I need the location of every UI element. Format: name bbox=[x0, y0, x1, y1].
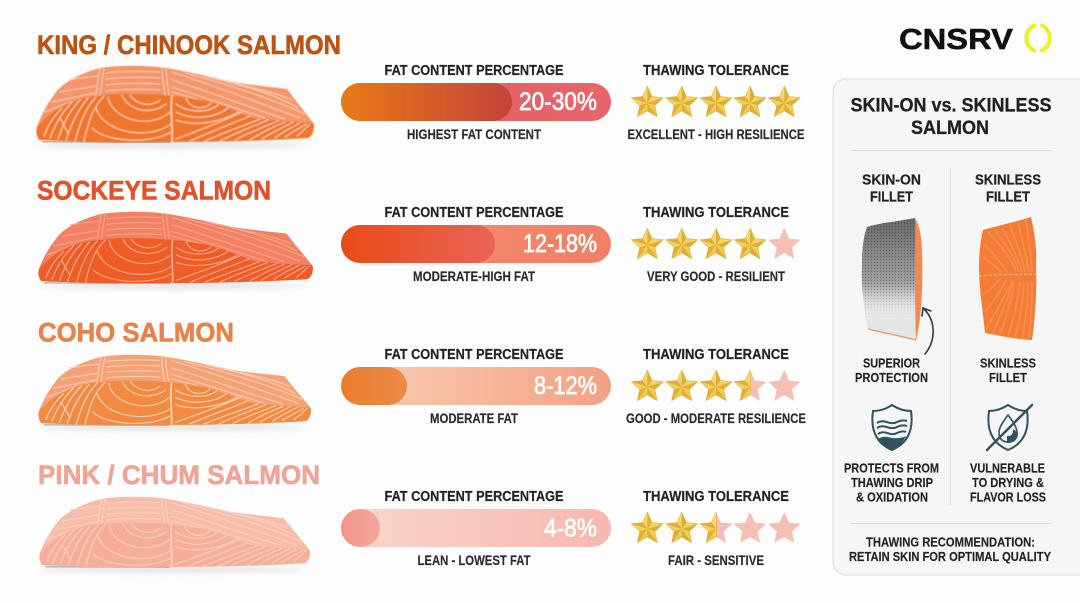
image: coho salmon fillet bbox=[38, 355, 311, 431]
heading: King / Chinook salmon: KING / CHINOOK SALMON bbox=[37, 30, 341, 60]
image: skinless fillet bbox=[979, 217, 1036, 340]
caption: superior protection: SUPERIOR bbox=[863, 356, 921, 370]
label: fat content percentage: FAT CONTENT PERCENTAGE bbox=[384, 489, 564, 505]
caption: skinless fillet: FILLET bbox=[989, 370, 1027, 385]
bar: fat 8-12%: 8-12% bbox=[534, 372, 597, 400]
note: highest fat content: HIGHEST FAT CONTENT bbox=[407, 127, 542, 142]
row: Coho salmon bbox=[38, 318, 806, 431]
column heading: skinless fillet: FILLET bbox=[986, 190, 1030, 206]
caption: skinless fillet: SKINLESS bbox=[980, 356, 1036, 370]
text: thawing recommendation bbox=[849, 534, 1051, 564]
logo: CNSRV: CNSRV bbox=[899, 24, 1014, 56]
label: fat content percentage: FAT CONTENT PERCENTAGE bbox=[384, 63, 564, 79]
rating: five stars bbox=[631, 86, 800, 117]
text: protects from thawing drip: & OXIDATION bbox=[856, 490, 928, 504]
logo: CNSRV bbox=[899, 24, 1050, 56]
text: protects from thawing drip: THAWING DRIP bbox=[851, 475, 933, 490]
note: fair sensitive: FAIR - SENSITIVE bbox=[668, 553, 764, 568]
text: protects from thawing drip: PROTECTS FROM bbox=[844, 460, 939, 476]
bar: fat 4-8% bbox=[341, 509, 611, 547]
text: thawing recommendation: THAWING RECOMMENDATION: bbox=[866, 534, 1035, 550]
note: excellent resilience: EXCELLENT - HIGH RESILIENCE bbox=[628, 127, 804, 142]
column heading: skin-on fillet: SKIN-ON bbox=[862, 172, 921, 188]
heading: Coho salmon: COHO SALMON bbox=[38, 318, 234, 348]
bar: fat 4-8%: 4-8% bbox=[544, 514, 597, 542]
icon: shield crossed out with drop bbox=[987, 405, 1032, 450]
row: King / Chinook salmon bbox=[36, 30, 805, 148]
bar: fat 20-30% bbox=[341, 83, 611, 121]
caption: superior protection: PROTECTION bbox=[855, 370, 928, 385]
label: fat content percentage: FAT CONTENT PERCENTAGE bbox=[384, 347, 564, 363]
caption: skinless fillet bbox=[980, 356, 1036, 385]
icon: shield with waves bbox=[872, 405, 912, 450]
bar: fat 20-30%: 20-30% bbox=[519, 88, 597, 116]
image: sockeye salmon fillet bbox=[38, 212, 313, 289]
panel heading: SALMON bbox=[911, 118, 989, 139]
label: thawing tolerance: THAWING TOLERANCE bbox=[643, 63, 789, 79]
text: vulnerable to drying: VULNERABLE bbox=[970, 460, 1045, 476]
column heading: skinless fillet: SKINLESS bbox=[975, 172, 1041, 188]
note: lean lowest fat: LEAN - LOWEST FAT bbox=[418, 553, 531, 568]
text: thawing recommendation: RETAIN SKIN FOR OPTIMAL QUALITY bbox=[849, 549, 1051, 564]
arrow: to skin bbox=[922, 308, 933, 354]
column heading: skinless fillet bbox=[975, 172, 1041, 206]
text: protects from thawing drip bbox=[844, 460, 939, 504]
heading: Pink / Chum salmon: PINK / CHUM SALMON bbox=[38, 460, 320, 490]
rating: four stars bbox=[631, 228, 800, 259]
label: thawing tolerance: THAWING TOLERANCE bbox=[643, 347, 789, 363]
note: moderate-high fat: MODERATE-HIGH FAT bbox=[413, 269, 536, 284]
column heading: skin-on fillet bbox=[862, 172, 921, 206]
row: Sockeye salmon bbox=[37, 176, 800, 289]
text: vulnerable to drying bbox=[970, 460, 1046, 504]
image: pink salmon fillet bbox=[39, 497, 310, 573]
note: very good resilient: VERY GOOD - RESILIENT bbox=[647, 269, 786, 284]
label: thawing tolerance: THAWING TOLERANCE bbox=[643, 205, 789, 221]
bar: fat 8-12% bbox=[341, 367, 611, 405]
column heading: skin-on fillet: FILLET bbox=[870, 190, 913, 206]
panel heading: SKIN-ON vs. SKINLESS bbox=[850, 96, 1052, 116]
panel heading bbox=[850, 96, 1052, 139]
rating: three and a half stars bbox=[631, 370, 800, 401]
note: moderate fat: MODERATE FAT bbox=[430, 411, 519, 426]
heading: Sockeye salmon: SOCKEYE SALMON bbox=[37, 176, 271, 206]
text: vulnerable to drying: TO DRYING & bbox=[972, 475, 1044, 490]
label: fat content percentage: FAT CONTENT PERCENTAGE bbox=[384, 205, 564, 221]
caption: superior protection bbox=[855, 356, 928, 385]
row: Pink / Chum salmon bbox=[38, 460, 800, 573]
note: good moderate resilience: GOOD - MODERATE RESILIENCE bbox=[626, 411, 806, 426]
rating: two and a half stars bbox=[631, 512, 800, 543]
image: skin-on fillet bbox=[862, 218, 922, 341]
label: thawing tolerance: THAWING TOLERANCE bbox=[643, 489, 789, 505]
image: king salmon fillet bbox=[36, 66, 314, 148]
text: vulnerable to drying: FLAVOR LOSS bbox=[970, 490, 1046, 504]
bar: fat 12-18%: 12-18% bbox=[523, 230, 597, 258]
bar: fat 12-18% bbox=[341, 225, 611, 263]
panel: skin-on vs skinless bbox=[833, 79, 1080, 575]
